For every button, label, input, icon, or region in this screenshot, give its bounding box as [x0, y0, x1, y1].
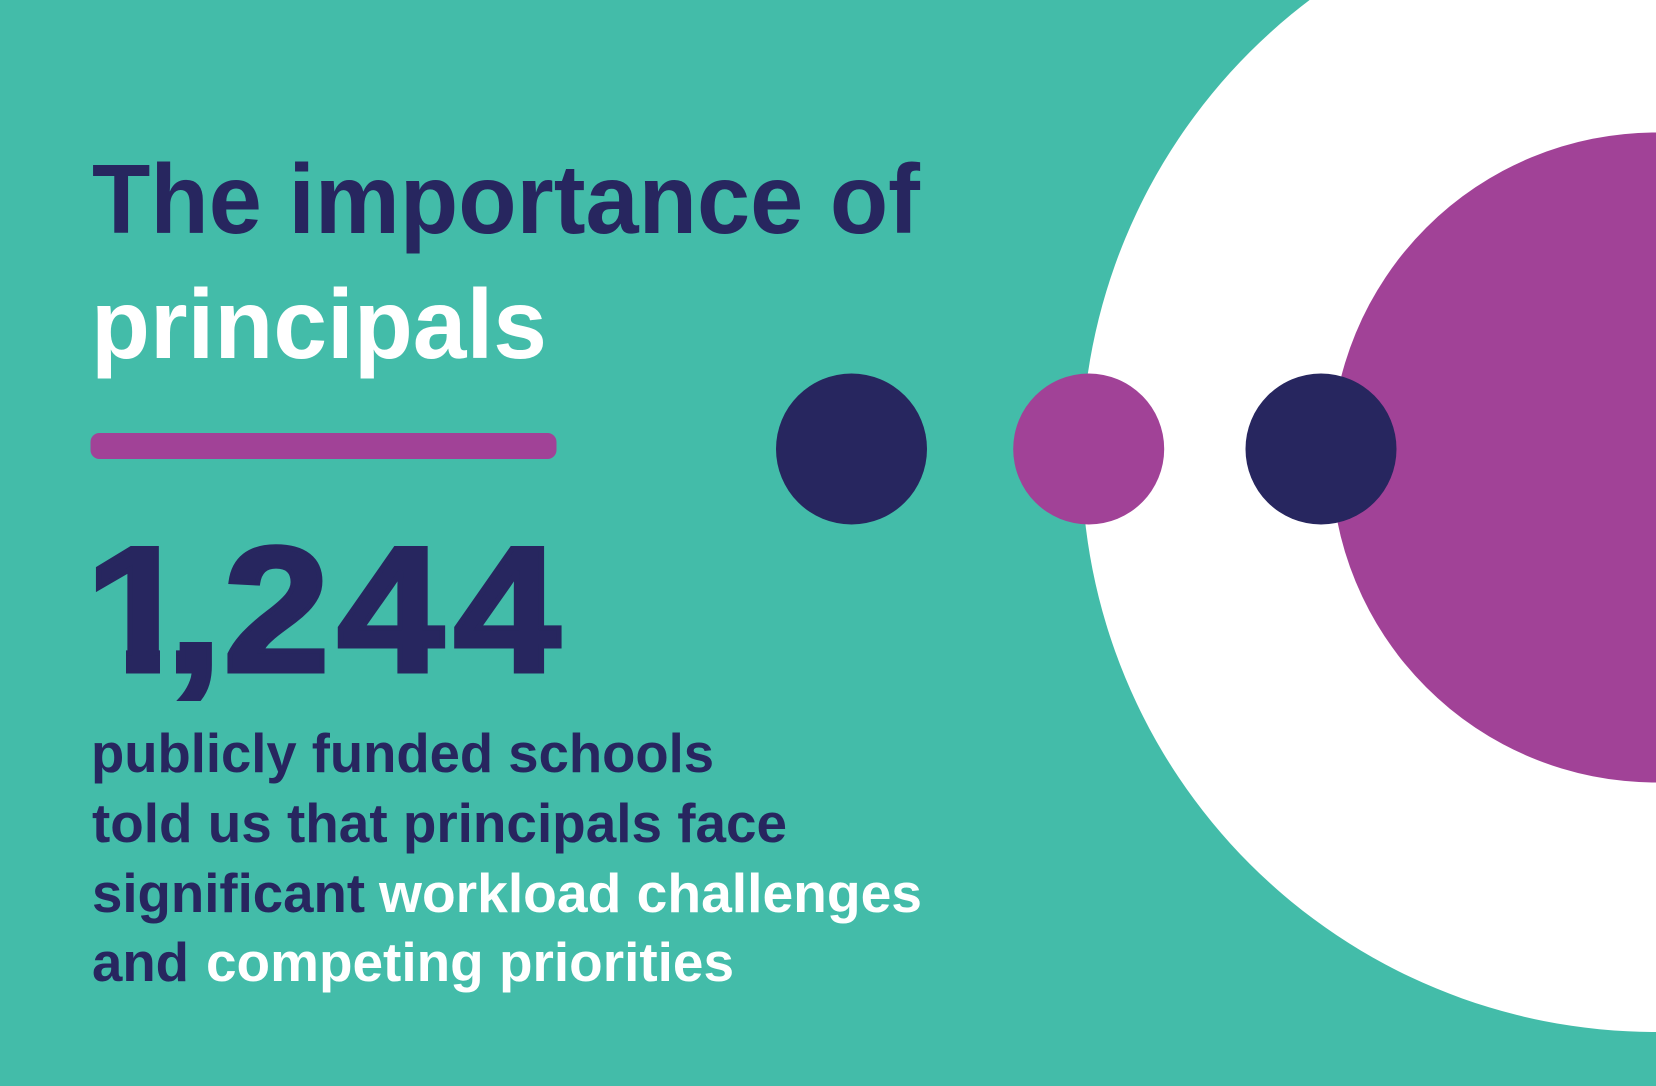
title: [91, 144, 920, 379]
big number: 4: [454, 511, 560, 710]
purple divider bar: [90, 433, 556, 459]
big number: [96, 544, 562, 701]
line 4 navy part: and: [92, 931, 189, 993]
title line 2: principals: [91, 269, 547, 379]
large white circle: [1082, 0, 1656, 1032]
line 3 navy part: significant: [92, 862, 365, 924]
navy dot left: [776, 374, 927, 524]
big number: 1: [86, 511, 192, 710]
title line 1: The importance of: [92, 144, 920, 254]
line 3 white part: workload challenges: [378, 862, 922, 924]
description text: [91, 722, 922, 993]
line 2: told us that principals face: [92, 792, 787, 854]
purple dot middle: [1013, 374, 1164, 524]
big number: ,: [169, 511, 222, 710]
navy dot right: [1246, 374, 1396, 524]
graphic: concentric circles and dots: [776, 0, 1656, 1032]
line 4 white part: competing priorities: [206, 931, 734, 993]
big number: 2: [224, 511, 329, 710]
big number: 4: [338, 511, 444, 710]
line 1: publicly funded schools: [91, 722, 714, 784]
large purple circle: [1331, 132, 1656, 782]
